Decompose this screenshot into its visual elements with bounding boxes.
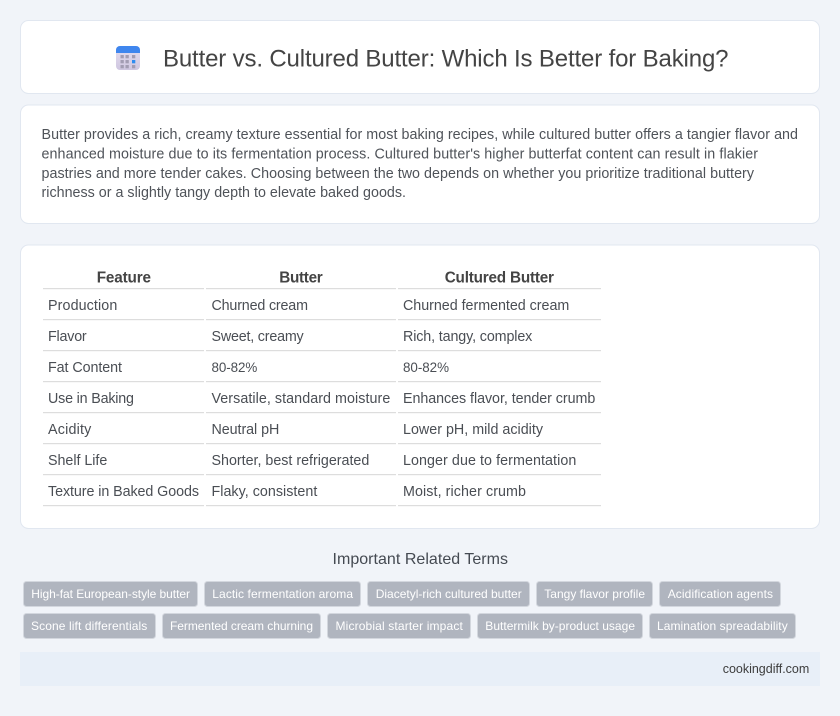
row: shelf life	[43, 453, 601, 475]
tag	[24, 582, 198, 606]
heading: important related terms: Important Related Terms	[332, 551, 508, 568]
intro paragraph: Butter provides a rich, creamy texture essential for most baking recipes, while cultured butter offers a tangier flavor and	[42, 127, 798, 143]
tag: High-fat European-style butter	[31, 587, 190, 601]
panel: related term tags	[24, 582, 796, 638]
row: use in baking: Enhances flavor, tender crumb	[403, 391, 595, 407]
title: Butter vs. Cultured Butter: Which Is Better for Baking?	[163, 46, 728, 72]
row: flavor: Sweet, creamy	[212, 329, 305, 345]
row: production: Production	[48, 298, 117, 314]
tag	[328, 614, 470, 638]
row: fat content: 80-82%	[212, 360, 257, 375]
row: use in baking: Versatile, standard moisture	[212, 391, 390, 407]
row: production: Churned fermented cream	[403, 298, 569, 314]
tag: Lactic fermentation aroma	[212, 587, 353, 601]
intro paragraph: richness or a slightly tangy depth to elevate baked goods.	[42, 185, 406, 201]
row: flavor	[43, 329, 601, 351]
row: shelf life: Longer due to fermentation	[403, 453, 576, 469]
tag	[204, 582, 360, 606]
table header row: Feature	[97, 270, 151, 287]
icon: calendar	[116, 46, 140, 70]
tag	[24, 614, 156, 638]
row: production: Churned cream	[212, 298, 308, 314]
row: texture in baked goods: Texture in Baked Goods	[48, 484, 199, 500]
footer	[20, 652, 820, 686]
tag	[660, 582, 780, 606]
tag	[368, 582, 530, 606]
row: shelf life: Shorter, best refrigerated	[212, 453, 369, 469]
table header row: Butter	[279, 270, 323, 287]
row: flavor: Rich, tangy, complex	[403, 329, 532, 345]
row: shelf life: Shelf Life	[48, 453, 107, 469]
row: flavor: Flavor	[48, 329, 87, 345]
tag	[162, 614, 320, 638]
tag: Fermented cream churning	[170, 619, 313, 633]
tag: Buttermilk by-product usage	[485, 619, 635, 633]
table header row: Cultured Butter	[445, 270, 554, 287]
tag	[536, 582, 652, 606]
panel: header	[20, 20, 820, 94]
tag: Scone lift differentials	[31, 619, 147, 633]
row: use in baking	[43, 391, 601, 413]
tag: Tangy flavor profile	[544, 587, 645, 601]
tag: Microbial starter impact	[336, 619, 463, 633]
row: texture in baked goods: Moist, richer crumb	[403, 484, 526, 500]
table header row	[43, 270, 601, 289]
tag: Diacetyl-rich cultured butter	[376, 587, 522, 601]
row: texture in baked goods	[43, 484, 601, 506]
tag: Lamination spreadability	[657, 619, 788, 633]
footer source text: cookingdiff.com	[723, 662, 809, 676]
row: use in baking: Use in Baking	[48, 391, 134, 407]
tag: Acidification agents	[668, 587, 773, 601]
row: acidity: Neutral pH	[212, 422, 279, 438]
intro paragraph: enhanced moisture due to its fermentation process. Cultured butter's higher butterfat content can result in flakier	[42, 146, 758, 162]
row: fat content: Fat Content	[48, 360, 122, 376]
tag	[478, 614, 642, 638]
row: acidity: Lower pH, mild acidity	[403, 422, 544, 438]
intro paragraph: pastries and more tender cakes. Choosing between the two depends on whether you prioritize traditional buttery	[42, 166, 755, 182]
row: acidity	[43, 422, 601, 444]
tag	[650, 614, 796, 638]
row: production	[43, 298, 601, 320]
intro paragraph	[42, 127, 798, 201]
row: acidity: Acidity	[48, 422, 92, 438]
panel: introduction	[20, 105, 820, 224]
row: fat content: 80-82%	[403, 360, 449, 375]
panel: comparison table	[20, 245, 820, 528]
row: fat content	[43, 360, 601, 382]
row: texture in baked goods: Flaky, consistent	[212, 484, 317, 500]
